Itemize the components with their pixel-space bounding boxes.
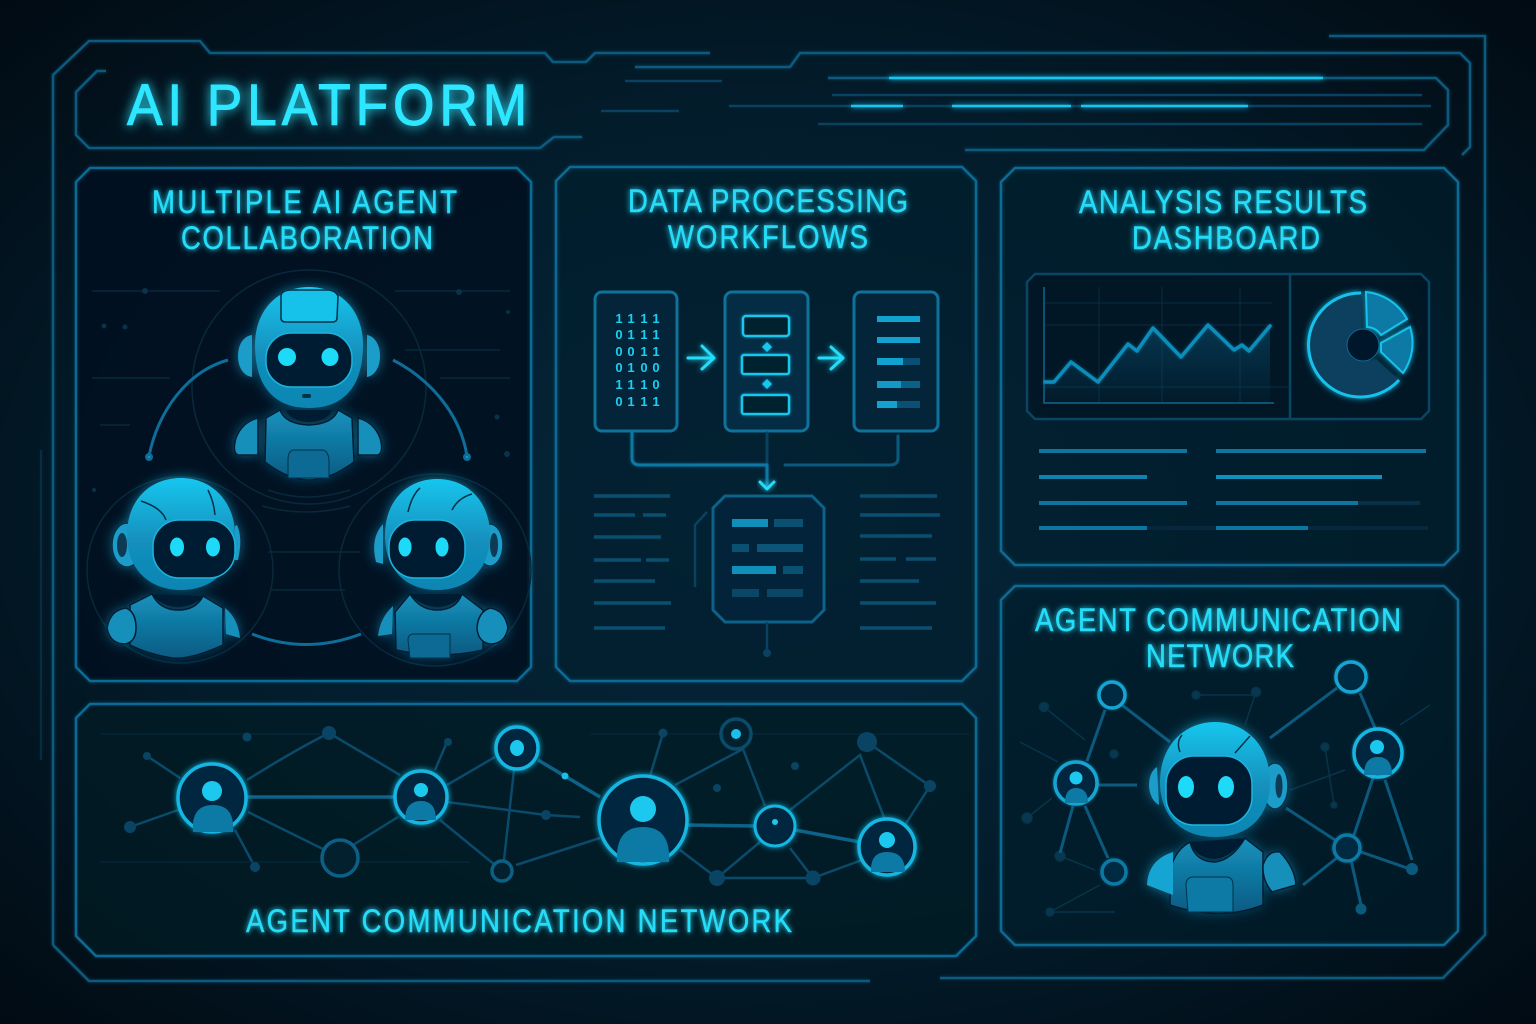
panel frame [76,168,531,681]
side bracket and stub [695,512,771,657]
binary digits: 0 [652,377,660,392]
panel: agent communication network strip [76,704,976,956]
binary digits: 1 [640,377,648,392]
network nodes [1099,662,1366,884]
binary digits: 0 [627,344,635,359]
flowchart boxes [742,316,789,414]
connection arcs [146,360,470,644]
binary digits: 1 [640,394,648,409]
signal node 5 [755,806,795,846]
panel frame [1001,586,1458,945]
heading: WORKFLOWS [668,220,868,256]
arrow: input to flow [688,346,714,369]
panel frame [76,704,976,956]
binary digits: 1 [640,344,648,359]
heading [152,185,457,257]
output bar rows [877,316,920,408]
binary digits: 1 [627,327,635,342]
panel frame [1001,168,1458,565]
heading: NETWORK [1146,639,1294,675]
signal node 3 [496,727,538,769]
binary digits: 1 [652,311,660,326]
panel: multiple AI agent collaboration [76,168,531,681]
heading: AGENT COMMUNICATION [1035,603,1401,639]
binary digits: 1 [652,394,660,409]
header bar [76,71,1448,150]
binary digits: 0 [640,360,648,375]
binary digits: 1 [627,394,635,409]
binary digits: 1 [640,311,648,326]
heading: DATA PROCESSING [628,184,908,220]
binary digits: 1 [615,311,623,326]
user node: left [1055,762,1097,804]
binary digits: 0 [615,327,623,342]
binary digits: 0 [652,360,660,375]
user node: right [1354,729,1402,777]
user node 1 [178,764,246,832]
network edges [100,733,970,878]
arrow: flow to output [819,347,843,369]
line chart [1044,287,1290,403]
user node 6 [859,819,915,875]
dim dots [124,726,936,886]
heading [1079,185,1367,257]
icon: bottom-left robot [107,478,240,658]
user node 4 [599,776,687,864]
heading: COLLABORATION [181,221,433,257]
panel: data processing workflows [556,167,976,681]
icon: top robot [234,287,382,480]
binary digits [615,311,660,409]
panel: agent communication network with robot [1001,586,1458,945]
icon: bottom-right robot [374,479,508,658]
binary digits: 1 [627,377,635,392]
panel: analysis results dashboard [1001,168,1458,565]
card: flowchart [725,292,808,431]
binary digits: 0 [615,344,623,359]
header data lines [601,78,1431,124]
binary digits: 1 [627,360,635,375]
icon: center robot [1147,722,1296,914]
workflow connectors [632,433,898,489]
panel frame [556,167,976,681]
donut chart [1309,292,1413,397]
module bars [732,519,803,597]
heading: MULTIPLE AI AGENT [152,185,457,221]
binary digits: 1 [615,377,623,392]
title: AI PLATFORM [127,73,527,137]
network edges [1060,688,1418,914]
binary digits: 0 [615,360,623,375]
hollow nodes [322,719,751,881]
card: output bars [854,292,938,431]
binary digits: 1 [652,327,660,342]
text lines: left [594,496,671,628]
heading: AGENT COMMUNICATION NETWORK [246,904,792,940]
user node 2 [395,771,447,823]
binary digits: 0 [615,394,623,409]
heading [1035,603,1401,675]
faint network [1020,688,1430,916]
binary digits: 1 [627,311,635,326]
binary digits: 1 [652,344,660,359]
binary digits: 1 [640,327,648,342]
result module [713,496,824,622]
faint circuit lines and rings [87,270,531,666]
text lines: right [860,496,940,628]
chart frame [1027,274,1429,419]
summary lines [1039,449,1428,530]
heading [628,184,908,256]
card: binary input [595,292,677,431]
heading: ANALYSIS RESULTS [1079,185,1367,221]
header frame [76,71,1448,150]
heading: DASHBOARD [1132,221,1320,257]
